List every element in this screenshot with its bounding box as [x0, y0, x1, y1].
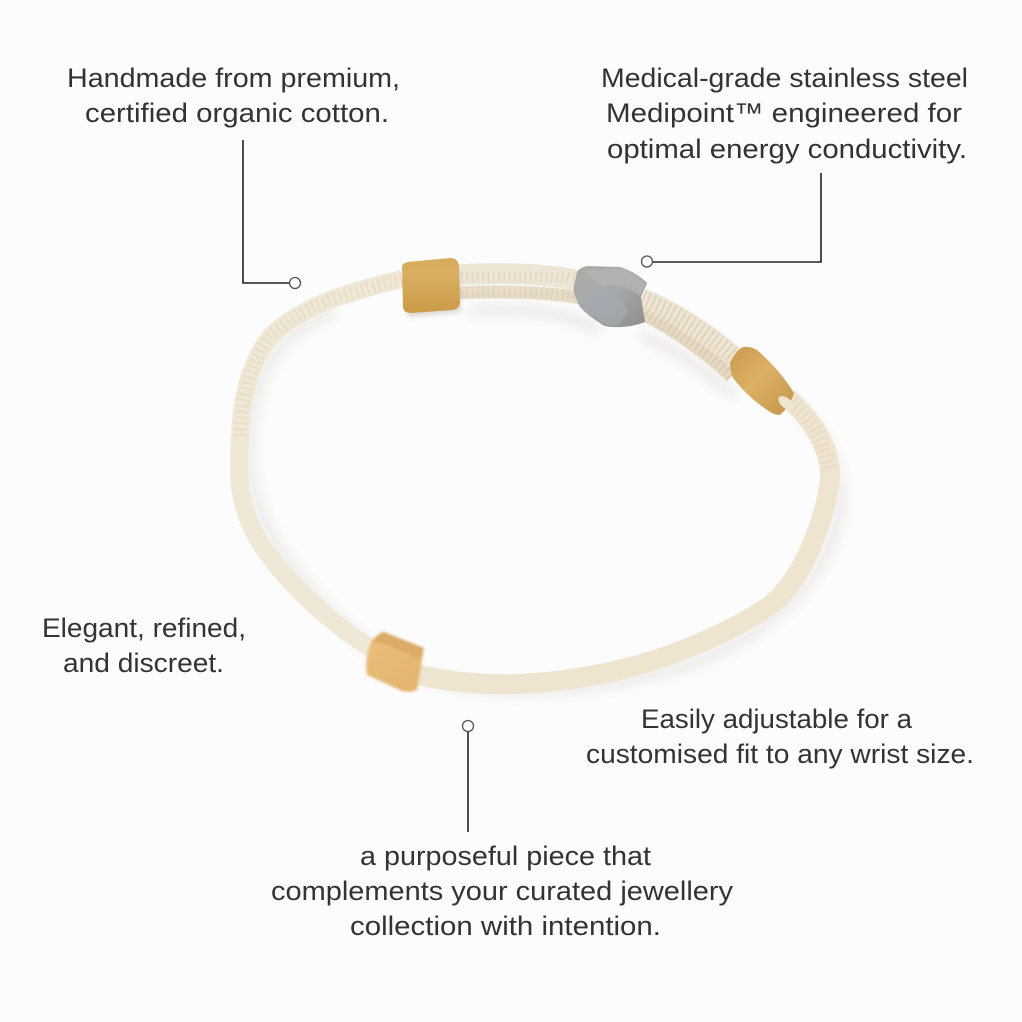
cord: left and lower loop — [239, 279, 402, 662]
callout: purposeful piece — [271, 720, 734, 941]
leader line: steel — [642, 173, 821, 267]
cord shadow — [250, 310, 840, 690]
callout: organic cotton — [67, 63, 400, 288]
callout: elegant: Elegant, refined, — [42, 613, 246, 643]
cord: double strand right — [640, 312, 732, 376]
callout text: cotton: certified organic cotton. — [85, 98, 389, 128]
gold bead: bottom, out of focus — [366, 632, 424, 692]
callout text: purposeful: collection with intention. — [350, 911, 661, 941]
cord: braid texture left — [240, 279, 402, 437]
steel Medipoint bead — [574, 266, 647, 327]
callout text: purposeful: complements your curated jewellery — [271, 876, 734, 906]
callout: adjustable: Easily adjustable for a — [641, 704, 913, 734]
gold bead: right — [730, 347, 796, 415]
gold bead: top — [402, 258, 461, 317]
callout text: steel: Medical-grade stainless steel — [601, 63, 968, 93]
leader line: purposeful — [462, 720, 474, 832]
cord: bottom and right — [410, 398, 830, 684]
callout text: steel: Medipoint™ engineered for — [606, 98, 962, 128]
callout text: purposeful: a purposeful piece that — [360, 841, 652, 871]
callout text: cotton: Handmade from premium, — [67, 63, 400, 93]
callout text: steel: optimal energy conductivity. — [607, 134, 967, 164]
callout: elegant: and discreet. — [63, 648, 224, 678]
leader line: cotton — [243, 140, 300, 288]
callout: stainless steel — [601, 63, 968, 267]
cord: double strand top — [456, 292, 580, 298]
bracelet product photo — [239, 258, 840, 692]
callout: adjustable: customised fit to any wrist size. — [586, 739, 974, 769]
cord: braid texture right — [788, 398, 829, 470]
